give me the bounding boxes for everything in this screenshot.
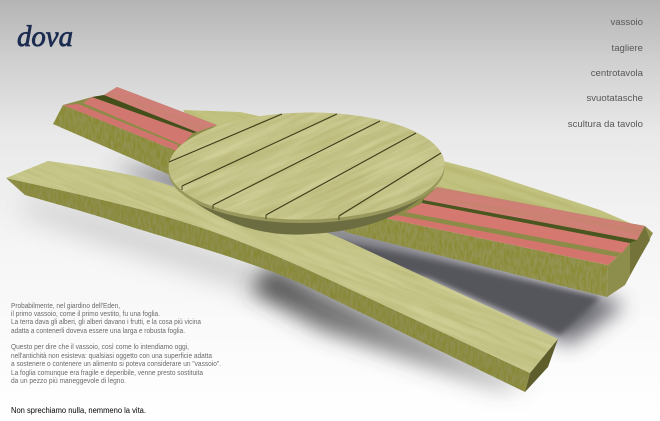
tray top [168, 111, 445, 221]
lower plank top [6, 161, 558, 373]
body text: a sostenere o contenere un alimento si poteva considerare un "vassoio". [11, 361, 221, 368]
body text [11, 303, 221, 385]
navigation list: centrotavola [591, 68, 644, 79]
body text: adatta a contenerli doveva essere una larga e robusta foglia. [11, 328, 185, 335]
navigation list: vassoio [610, 17, 643, 28]
right dark groove [422, 199, 637, 243]
right red strip middle [405, 203, 630, 253]
body text: La foglia comunque era fragile e deperibile, venne presto sostituita [11, 370, 203, 377]
navigation list: tagliere [612, 43, 643, 54]
navigation list: scultura da tavolo [568, 119, 643, 130]
logo: dova: dova [17, 20, 73, 53]
right plank top [385, 187, 645, 257]
navigation list: svuotatasche [586, 93, 643, 104]
left red strip front [63, 104, 178, 151]
tray slits [169, 114, 441, 220]
left red plank end [53, 87, 217, 174]
lower plank end [525, 339, 558, 392]
right red strip back [423, 187, 645, 240]
left plank top [63, 87, 217, 151]
right plank end face [607, 226, 653, 297]
lower curved plank [6, 161, 558, 392]
body text: nell'antichità non esisteva: qualsiasi oggetto con una superficie adatta [11, 353, 212, 360]
left red strip back [104, 87, 217, 132]
left dark groove [92, 95, 197, 133]
round tray [168, 112, 444, 235]
body text: il primo vassoio, come il primo vestito, fu una foglia. [11, 311, 160, 318]
tray rim [168, 114, 445, 225]
right plank front face [345, 205, 608, 297]
tagline: Non sprechiamo nulla, nemmeno la vita. [11, 406, 146, 415]
left red strip middle [83, 97, 193, 145]
tray base [178, 190, 425, 235]
right red plank end [345, 187, 653, 297]
navigation list [568, 17, 644, 130]
body text: La terra dava gli alberi, gli alberi davano i frutti, e la cosa più vicina [11, 319, 201, 326]
body text: Probabilmente, nel giardino dell'Eden, [11, 303, 120, 310]
cast shadows [20, 165, 625, 392]
lower plank side [6, 178, 530, 392]
body text: Questo per dire che il vassoio, così come lo intendiamo oggi, [11, 344, 189, 351]
back plank [183, 110, 653, 257]
body text: da un pezzo più maneggevole di legno. [11, 378, 126, 385]
left plank front face [53, 105, 215, 190]
right red strip front [385, 215, 617, 265]
